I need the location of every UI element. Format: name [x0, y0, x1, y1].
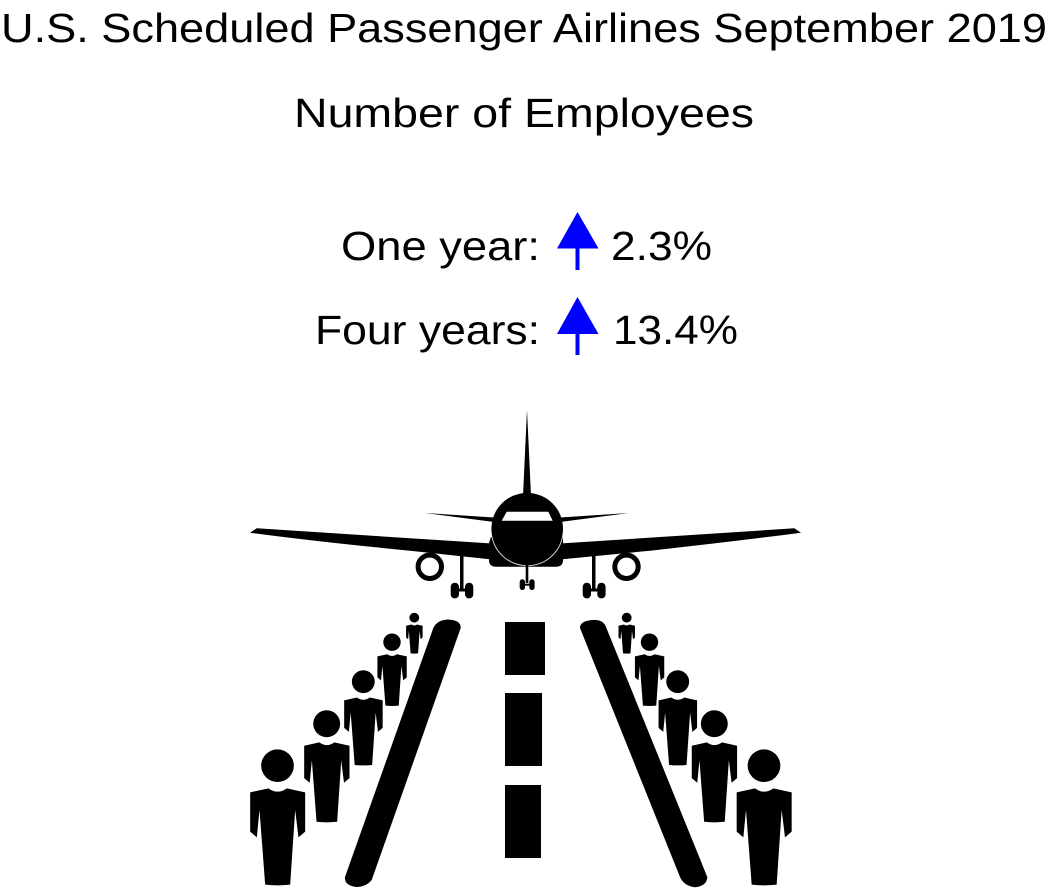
icon: up arrow one year	[557, 212, 598, 270]
right queue of people	[618, 613, 792, 885]
four years value: 13.4%	[613, 307, 738, 353]
left queue of people	[250, 613, 423, 885]
runway right edge	[580, 620, 707, 887]
icon: up arrow four years	[557, 297, 598, 355]
runway left edge	[345, 620, 461, 887]
one year label: One year:	[341, 223, 540, 269]
icon: airplane front view	[250, 410, 801, 598]
runway centre stripes	[505, 622, 545, 858]
title: U.S. Scheduled Passenger Airlines September 2019	[1, 5, 1047, 51]
one year value: 2.3%	[611, 223, 712, 269]
subtitle: Number of Employees	[294, 90, 754, 136]
four years label: Four years:	[315, 307, 540, 353]
